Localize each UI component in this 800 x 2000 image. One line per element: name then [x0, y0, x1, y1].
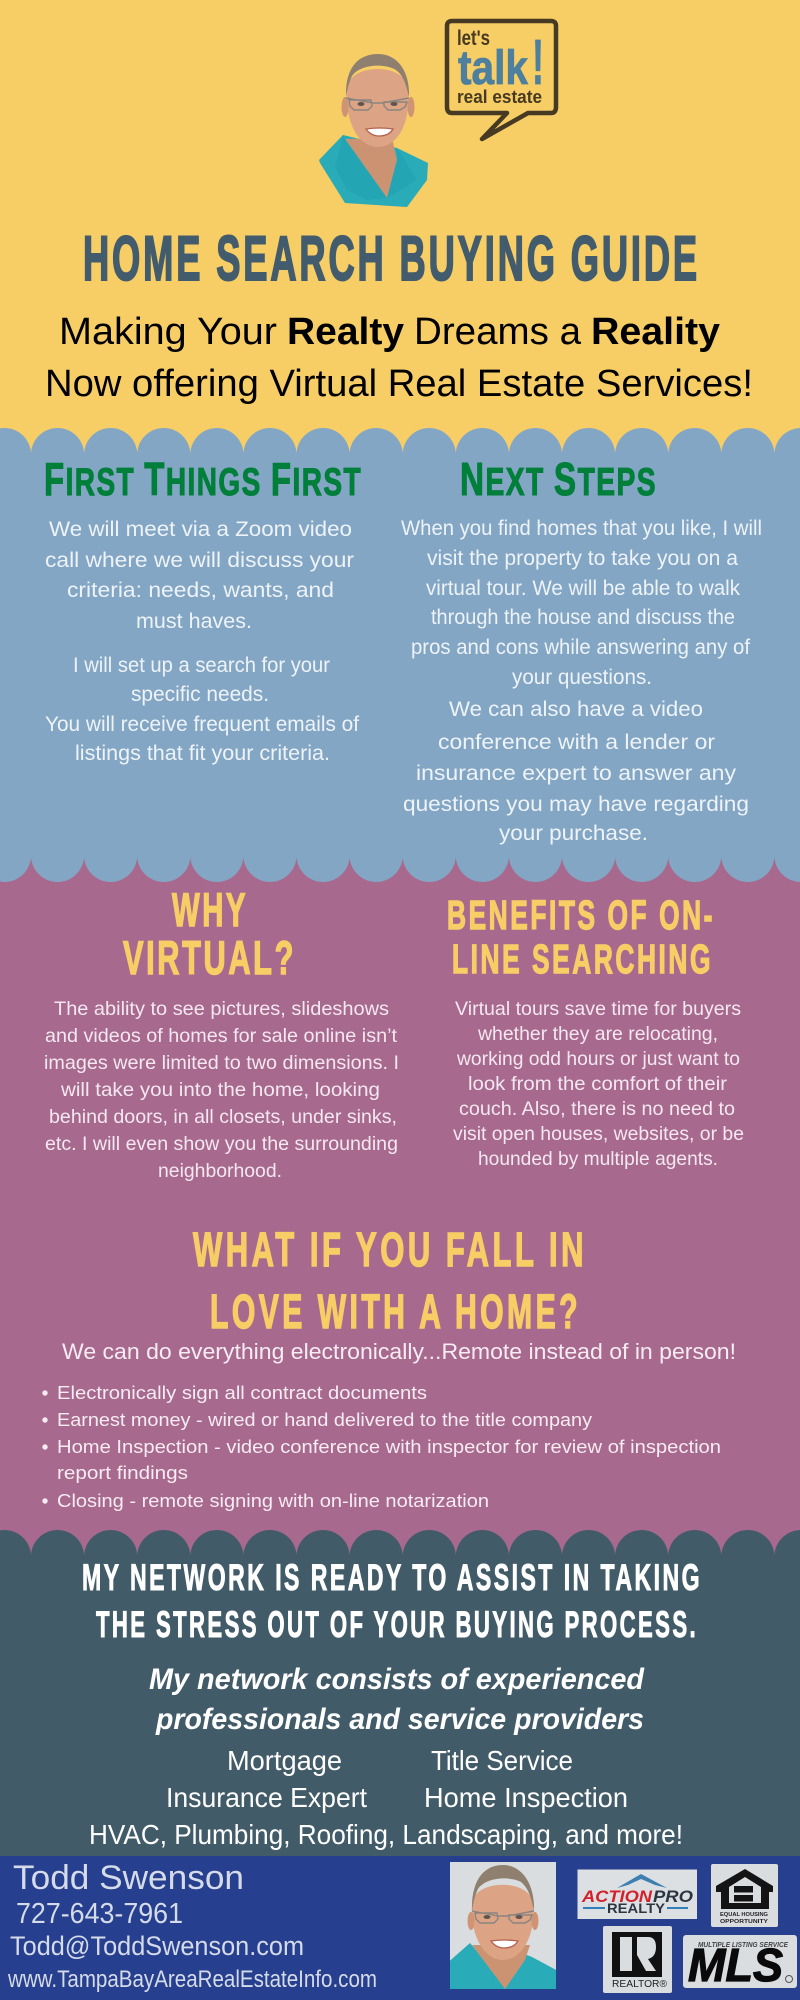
logo: Action Pro Realty: ACTION — [581, 1887, 653, 1906]
text: next steps: pros and cons while answering any of — [411, 635, 750, 659]
panel: dark network section — [0, 1530, 800, 1856]
heading: Why Virtual?: VIRTUAL? — [123, 931, 296, 984]
bullet list: report findings — [57, 1462, 188, 1483]
subheading: experienced professionals — [149, 1663, 645, 1736]
bullet list: Closing - remote signing with on-line notarization — [57, 1490, 489, 1511]
heading: Why Virtual?: WHY — [172, 883, 248, 936]
subtitle line 1: Dreams a — [414, 311, 582, 353]
text: benefits: look from the comfort of their — [468, 1073, 728, 1095]
text: first things first: You will receive frequent emails of — [45, 712, 359, 736]
heading: What if you fall in love with a home?: LOVE WITH A HOME? — [210, 1285, 581, 1339]
heading: my network — [82, 1556, 702, 1645]
text: why virtual: and videos of homes for sale online isn’t — [45, 1025, 398, 1047]
logo: let's talk real estate speech bubble — [447, 21, 556, 139]
logo: Realtor — [603, 1926, 672, 1993]
text: next steps: virtual tour. We will be able to walk — [426, 576, 740, 600]
heading: Why Virtual? — [123, 883, 296, 984]
text: first things first: must haves. — [136, 609, 252, 633]
text: next steps: conference with a lender or — [438, 730, 715, 754]
text: services list: HVAC, Plumbing, Roofing, Landscaping, and more! — [89, 1819, 683, 1850]
logo: let's talk real estate speech bubble: talk — [458, 42, 528, 95]
text: next steps: We can also have a video — [449, 697, 703, 721]
text: next steps: your questions. — [512, 665, 652, 689]
logo: Action Pro Realty: PRO — [653, 1887, 693, 1906]
text: benefits: visit open houses, websites, or be — [453, 1123, 744, 1145]
logo: Realtor: REALTOR® — [612, 1978, 667, 1990]
subheading: experienced professionals: My network consists of experienced — [149, 1663, 645, 1696]
text: next steps — [401, 516, 762, 845]
bullet list — [42, 1382, 721, 1511]
text: first things first: criteria: needs, wants, and — [67, 578, 334, 602]
text: first things first: specific needs. — [131, 682, 269, 706]
text: benefits: working odd hours or just want to — [456, 1048, 740, 1070]
subtitle line 1: Reality — [591, 311, 720, 353]
logo: Equal Housing Opportunity: EQUAL HOUSING — [720, 1912, 768, 1918]
text: next steps: insurance expert to answer any — [416, 761, 736, 785]
logo: let's talk real estate speech bubble: real estate — [457, 87, 542, 107]
text: why virtual: will take you into the home, looking — [60, 1079, 380, 1101]
bullet list: Earnest money - wired or hand delivered to the title company — [57, 1409, 593, 1430]
panel: blue scalloped section — [0, 428, 800, 882]
logo: Equal Housing Opportunity — [711, 1864, 778, 1927]
heading: Benefits of On-line Searching — [447, 892, 715, 982]
text: benefits: hounded by multiple agents. — [478, 1148, 718, 1170]
logo: let's talk real estate speech bubble: let's — [457, 27, 490, 50]
text: remote intro: We can do everything electronically...Remote instead of in person! — [62, 1339, 736, 1364]
text: benefits: whether they are relocating, — [477, 1023, 718, 1045]
contact details: Todd Swenson — [13, 1859, 244, 1897]
text: why virtual: neighborhood. — [158, 1160, 282, 1182]
text: services list: Title Service — [431, 1745, 573, 1776]
bullet list: Home Inspection - video conference with inspector for review of inspection — [57, 1436, 721, 1457]
heading: Next Steps: NEXT STEPS — [460, 453, 657, 505]
logo: Action Pro Realty — [578, 1870, 697, 1919]
bullet list: Electronically sign all contract documents — [57, 1382, 427, 1403]
footer portrait photo — [445, 1862, 560, 1990]
heading: What if you fall in love with a home? — [193, 1223, 587, 1339]
text: services list: Mortgage — [227, 1745, 342, 1776]
text: services list: Insurance Expert — [166, 1782, 367, 1813]
text: benefits: couch. Also, there is no need to — [459, 1098, 735, 1120]
panel: yellow header — [0, 0, 800, 460]
text: first things first: We will meet via a Zoom video — [49, 517, 352, 541]
heading: What if you fall in love with a home?: WHAT IF YOU FALL IN — [193, 1223, 587, 1277]
contact details: Todd@ToddSwenson.com — [10, 1931, 304, 1961]
logo: MLS: MLS — [688, 1939, 783, 1991]
text: benefits — [453, 998, 744, 1170]
logo: MLS: MULTIPLE LISTING SERVICE — [698, 1942, 788, 1949]
text: why virtual — [44, 998, 399, 1182]
text: why virtual: images were limited to two dimensions. I — [44, 1052, 399, 1074]
subheading: experienced professionals: professionals and service providers — [155, 1703, 644, 1736]
logo: Equal Housing Opportunity: OPPORTUNITY — [720, 1919, 768, 1925]
contact details — [7, 1859, 377, 1993]
contact details: www.TampaBayAreaRealEstateInfo.com — [7, 1966, 377, 1993]
text: first things first — [45, 517, 359, 765]
text: next steps: When you find homes that you like, I will — [401, 516, 762, 540]
logo: Action Pro Realty: REALTY — [607, 1900, 666, 1916]
heading: First Things First: FIRST THINGS FIRST — [44, 453, 362, 505]
text: why virtual: etc. I will even show you the surrounding — [45, 1133, 398, 1155]
text: next steps: visit the property to take you on a — [427, 546, 738, 570]
text: why virtual: behind doors, in all closets, under sinks, — [49, 1106, 397, 1128]
text: first things first: I will set up a search for your — [73, 653, 330, 677]
text: first things first: call where we will discuss your — [45, 548, 354, 572]
contact details: 727-643-7961 — [16, 1898, 183, 1930]
text: why virtual: The ability to see pictures, slideshows — [54, 998, 389, 1020]
subtitle line 1 — [59, 311, 720, 353]
logo: let's talk real estate speech bubble: ! — [532, 26, 544, 98]
subtitle line 2: Now offering Virtual Real Estate Services! — [45, 363, 753, 405]
text: services list — [89, 1745, 683, 1850]
subtitle line 1: Making Your — [59, 311, 277, 353]
text: next steps: questions you may have regarding — [403, 792, 749, 816]
text: services list: Home Inspection — [424, 1782, 628, 1813]
text: first things first: listings that fit your criteria. — [75, 741, 330, 765]
subtitle line 1: Realty — [287, 311, 404, 353]
text: next steps: your purchase. — [499, 821, 648, 845]
text: next steps: through the house and discuss the — [431, 605, 735, 629]
panel: purple background — [0, 850, 800, 1570]
portrait photo of agent — [319, 54, 428, 207]
panel: purple section content — [42, 883, 744, 1511]
text: benefits: Virtual tours save time for buyers — [455, 998, 741, 1020]
panel: contact footer — [0, 1856, 800, 2000]
